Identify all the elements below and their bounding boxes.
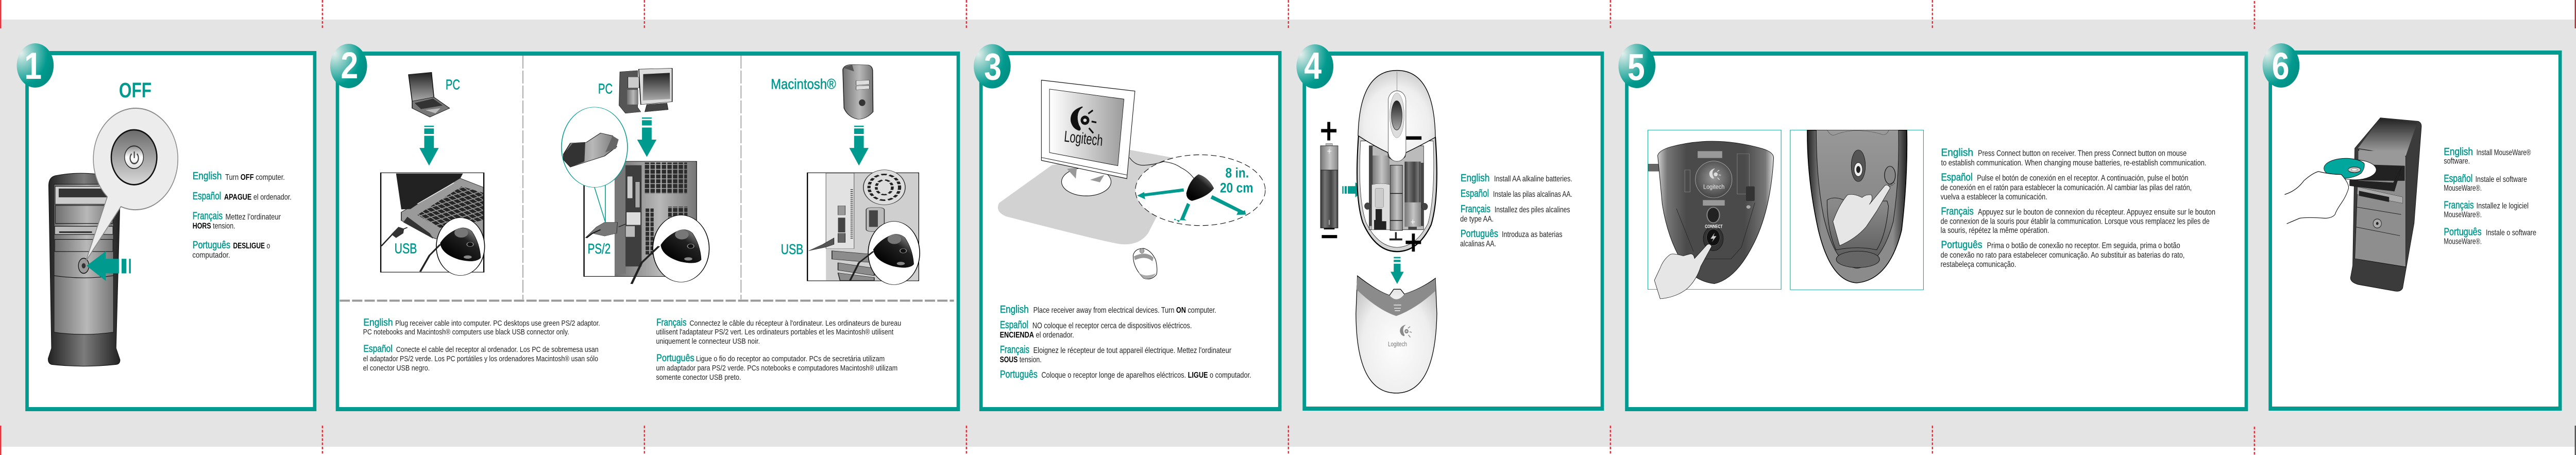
text: English: Place receiver away from electrical devices. Turn ON computer. [1033, 306, 1216, 315]
text: Español [1461, 188, 1572, 199]
text: Português: alcalinas AA. [1460, 240, 1496, 248]
text: Français: Français [1000, 344, 1029, 355]
illustrations: three connection options: PC [598, 81, 613, 97]
arrow into mouse [1342, 182, 1365, 197]
number badge 6: 6 [2272, 45, 2290, 88]
text: Français: Installez le logiciel [2477, 202, 2529, 211]
text: English [2444, 146, 2531, 166]
text: Français [2444, 199, 2529, 220]
text: Español: APAGUE el ordenador. [224, 193, 292, 202]
text: English: English [1000, 304, 1029, 315]
text: Français: Connectez le câble du récepteur à l'ordinateur. Les ordinateurs de bureau [689, 319, 901, 327]
polarity marks on mouse [1405, 138, 1421, 251]
hand pressing receiver button [1654, 244, 1711, 299]
text: Português: Introduza as baterias [1502, 230, 1562, 239]
text: English: Press Connect button on receiver. Then press Connect button on mouse [1978, 149, 2187, 158]
text: Português: Português [1941, 239, 1982, 250]
text: English: to establish communication. When changing mouse batteries, re-establish communication. [1941, 159, 2207, 167]
text: Español: Español [363, 343, 393, 354]
text: Español [2444, 173, 2527, 193]
icon: Power Mac G4 tower [843, 64, 873, 119]
panel: step 4 install batteries [1296, 44, 1602, 409]
text: Português: restabeleça comunicação. [1941, 260, 2016, 269]
receiver underside box: Logitech [1703, 183, 1724, 190]
text: Português: Português [193, 239, 230, 250]
text: English: PC notebooks and Macintosh® computers use black USB connector only. [363, 328, 569, 336]
dashed range circle [1136, 155, 1265, 226]
text: English: English [1941, 146, 1973, 158]
desk surface [998, 150, 1174, 244]
icon: desktop computer [619, 68, 672, 113]
number badge 5: 5 [1628, 46, 1645, 89]
label distance: 8 in. [1225, 166, 1249, 181]
heading OFF: OFF [119, 78, 151, 102]
text: Português: Prima o botão de conexão no receptor. Em seguida, prima o botão [1987, 242, 2180, 250]
text: Español: MouseWare®. [2444, 184, 2482, 193]
text: Português: Português [2444, 226, 2482, 238]
receiver underside box [1648, 130, 1781, 290]
panel: step 1 turn off computer [16, 43, 315, 409]
panel: step 5 connect [1618, 44, 2246, 409]
illustrations: three connection options: PS/2 [588, 241, 611, 257]
text: Français: Français [656, 317, 687, 328]
text: English [193, 170, 285, 182]
text: English: English [1461, 172, 1489, 183]
text: English: English [363, 317, 393, 328]
label distance [1220, 166, 1253, 196]
illustration: computer tower with power callout [48, 108, 178, 366]
text: Português: Instale o software [2486, 228, 2536, 238]
text: English [363, 317, 600, 336]
illustration: inserting CD in computer [2285, 118, 2421, 291]
photo: laptop USB port [381, 173, 485, 276]
text: English: Plug receiver cable into computer. PC desktops use green PS/2 adaptor. [395, 319, 600, 327]
number badge 5 [1618, 44, 1655, 89]
text: Español: Español [1941, 171, 1973, 183]
arrow pointing to power button [87, 251, 131, 281]
photo: Macintosh USB port [807, 170, 920, 284]
number badge 1: 1 [24, 45, 42, 87]
column dividers [523, 56, 741, 299]
text: Français: SOUS tension. [1000, 356, 1042, 364]
hand holding disc [2285, 172, 2349, 224]
text: Español: de conexión en el ratón para establecer la comunicación. Al cambiar las pilas del ratón, [1941, 183, 2192, 192]
text: Español: ENCIENDA el ordenador. [1000, 331, 1074, 340]
text: Français: Français [1461, 203, 1490, 214]
illustration: connect buttons [1648, 130, 1923, 299]
text: English: software. [2444, 157, 2470, 166]
receiver underside box: CONNECT [1705, 224, 1723, 229]
callout: PS/2 adapter detail [562, 107, 628, 222]
illustrations: three connection options: USB [781, 241, 803, 258]
computer tower [2350, 118, 2421, 291]
number badge 2 [330, 44, 367, 88]
text: Português [1460, 228, 1562, 248]
text: Français: de connexion de la souris pour établir la communication. Lorsque vous remplacez les piles de [1941, 217, 2210, 226]
text: Español: Conecte el cable del receptor al ordenador. Los PC de sobremesa usan [396, 345, 599, 353]
text: Español: Español [2444, 173, 2472, 184]
hand pressing mouse button [1833, 185, 1890, 246]
text: Português: DESLIGUE o [233, 242, 270, 250]
text: English: Turn OFF computer. [225, 173, 285, 182]
text: Français [1941, 205, 2215, 235]
text: Português: Português [656, 352, 694, 363]
text: Português [2444, 226, 2536, 246]
text: English [1941, 146, 2207, 167]
text: Español [1941, 171, 2192, 201]
text: Español: Instale el software [2476, 175, 2527, 184]
text: Español: Instale las pilas alcalinas AA. [1493, 190, 1572, 199]
text: Français: Français [1941, 205, 1974, 217]
text: Español: Pulse el botón de conexión en el receptor. A continuación, pulse el botón [1977, 174, 2189, 183]
text: English [1461, 172, 1572, 183]
text: Español [363, 343, 599, 372]
text: Español: Español [1000, 319, 1028, 330]
illustration: monitor, desk and receiver [998, 80, 1265, 279]
battery cover [1356, 276, 1437, 393]
text: Português: Coloque o receptor longe de aparelhos eléctricos. LIGUE o computador. [1041, 371, 1251, 380]
text: Português: somente conector USB preto. [656, 373, 741, 381]
text: Português: computador. [192, 251, 230, 260]
illustrations: three connection options [381, 64, 920, 284]
mouse body with battery compartment [1357, 136, 1437, 251]
receiver cable [1129, 158, 1194, 179]
illustration: batteries and mouse [1320, 71, 1437, 393]
text: Français: Mettez l’ordinateur [226, 213, 281, 222]
illustrations: three connection options: Macintosh® [771, 76, 836, 92]
panel: step 2 plug in receiver [330, 44, 958, 409]
text: English: English [193, 170, 222, 181]
number badge 3 [974, 44, 1011, 89]
illustrations: three connection options: USB [395, 241, 417, 257]
text: Français: Appuyez sur le bouton de connexion du récepteur. Appuyez ensuite sur le bouton [1978, 208, 2215, 217]
number badge 1 [16, 43, 54, 88]
text: Español: el adaptador PS/2 verde. Los PC portátiles y los ordenadores Macintosh® usan sólo [363, 355, 598, 363]
text: Português [656, 352, 897, 381]
text: Français: uniquement le connecteur USB noir. [656, 337, 760, 345]
range arrows [1137, 188, 1246, 223]
arrow 2 [637, 117, 656, 157]
battery with polarity marks [1320, 122, 1338, 238]
text: Español [1000, 319, 1192, 340]
text: Português: Ligue o fio do receptor ao computador. PCs de secretária utilizam [696, 355, 885, 363]
text: English: English [2444, 146, 2473, 157]
arrow 1 [419, 126, 439, 165]
text: Español: NO coloque el receptor cerca de dispositivos eléctricos. [1032, 322, 1192, 330]
text: Português: MouseWare®. [2444, 237, 2482, 246]
text: Français [656, 317, 901, 345]
wireless mouse [1133, 248, 1157, 279]
mouse top shell [1358, 71, 1435, 161]
text: Français [193, 210, 281, 231]
illustrations: three connection options: PC [446, 77, 460, 93]
text: Français: utilisent l'adaptateur PS/2 vert. Les ordinateurs portables et les Macintosh® utilisent [656, 328, 893, 336]
text: Français: la souris, répétez la même opération. [1941, 226, 2049, 235]
number badge 6 [2263, 43, 2299, 88]
number badge 2: 2 [341, 45, 358, 87]
text: Français: Français [2444, 199, 2474, 211]
text: English: Install AA alkaline batteries. [1494, 175, 1572, 183]
text: English [1000, 304, 1216, 315]
mouse underside box [1790, 130, 1923, 290]
text: Français: MouseWare®. [2444, 211, 2482, 220]
text: English: Install MouseWare® [2477, 148, 2531, 157]
text: Español: Español [1461, 188, 1489, 199]
text: Português: Português [1000, 368, 1038, 380]
text: Português: Português [1461, 228, 1498, 239]
arrow down to cover [1391, 257, 1404, 284]
text: Português [192, 239, 270, 260]
text: Français: Eloignez le récepteur de tout appareil électrique. Mettez l'ordinateur [1033, 346, 1231, 355]
text: Français: Installez des piles alcalines [1495, 206, 1570, 214]
text: Español: el conector USB negro. [363, 364, 430, 372]
text: Français: Français [193, 210, 223, 222]
compact disc [2324, 158, 2376, 180]
arrow 3 [849, 126, 869, 165]
text: Français: de type AA. [1460, 215, 1494, 224]
panel: step 3 place receiver [974, 44, 1280, 409]
number badge 4: 4 [1304, 45, 1321, 87]
number badge 4 [1296, 44, 1333, 89]
text: Français [1000, 344, 1231, 364]
text: Español: vuelva a establecer la comunicación. [1941, 193, 2047, 201]
photo: desktop PS/2 port [584, 161, 709, 284]
text: Português [1941, 239, 2184, 269]
text: Français [1460, 203, 1570, 224]
label distance: 20 cm [1220, 181, 1253, 196]
text: Français: HORS tension. [193, 222, 235, 231]
mouse underside box: ECT [1887, 180, 1897, 188]
panel: step 6 install software [2263, 43, 2560, 409]
icon: laptop [409, 72, 450, 117]
receiver [1187, 175, 1214, 201]
text: Português: um adaptador para PS/2 verde. PCs notebooks e computadores Macintosh® utilizam [656, 364, 897, 372]
text: Español [193, 190, 292, 202]
text: Português [1000, 368, 1251, 380]
text: Español: Español [193, 190, 221, 201]
number badge 3: 3 [984, 46, 1002, 88]
monitor [1041, 80, 1135, 196]
monitor: Logitech [1063, 128, 1104, 149]
battery cover: Logitech [1388, 341, 1407, 348]
text: Português: de conexão no rato para estabelecer comunicação. Ao substituir as baterias do rato, [1941, 251, 2184, 260]
